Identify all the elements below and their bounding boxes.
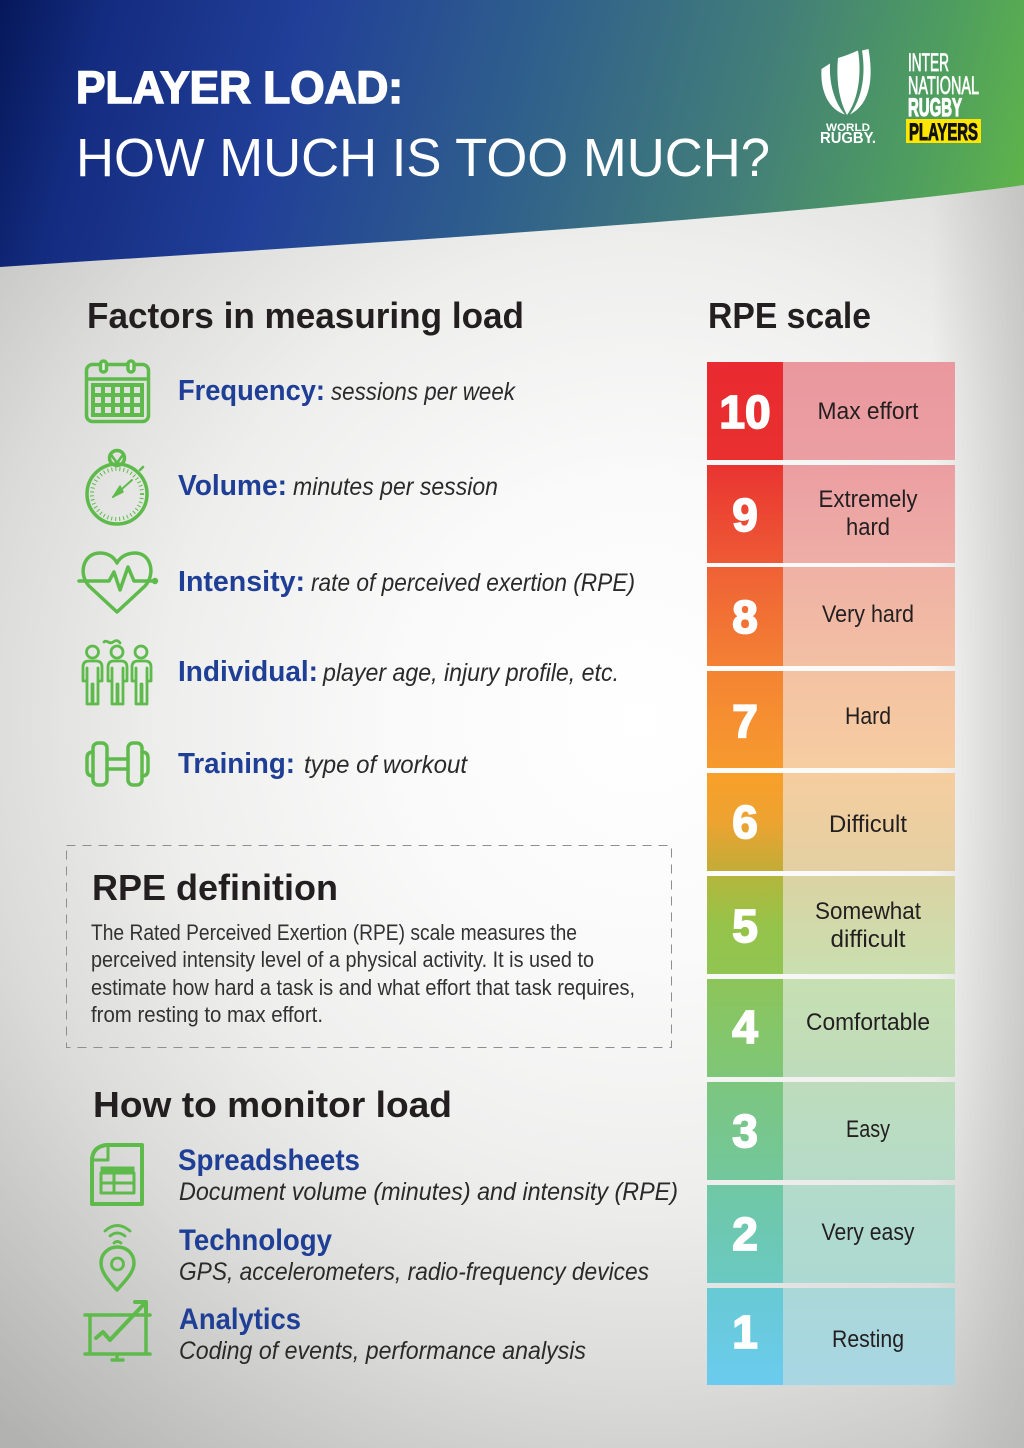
logo: International Rugby Players: INTER [908,49,949,77]
scale row 1: 1 [732,1306,758,1358]
scale row 10: 10 [719,386,771,438]
scale row 5: difficult [830,926,906,953]
heading: RPE definition: RPE definition [92,867,338,908]
panel: RPE definition [66,846,672,1048]
panel: factors in measuring load [79,295,635,785]
text: RPE definition body: estimate how hard a task is and what effort that task requires, [91,975,635,1000]
scale row 7 [707,671,955,768]
text: individual: Individual: [178,656,318,688]
scale row 8: Very hard [822,601,914,628]
heading: RPE scale: RPE scale [708,295,871,336]
text: training: Training: [178,748,295,780]
icon: stopwatch [87,450,147,524]
text: frequency: sessions per week [331,378,516,406]
text: volume: minutes per session [293,473,498,501]
scale row 5: 5 [732,900,758,952]
text: analytics: Coding of events, performance analysis [179,1337,586,1365]
text: technology: Technology [179,1224,332,1257]
icon: dumbbell [87,743,148,785]
icon: spreadsheet [92,1145,142,1204]
text: analytics [179,1303,586,1365]
title: PLAYER LOAD: [76,62,403,113]
scale row 4: Comfortable [806,1009,930,1036]
logo: World Rugby [820,49,876,147]
heading: factors: Factors in measuring load [87,295,524,336]
logo: World Rugby: RUGBY. [820,130,876,147]
text: individual [178,656,619,688]
logo: International Rugby Players: RUGBY [908,94,962,122]
text: RPE definition body [91,920,635,1027]
scale row 1 [707,1288,955,1385]
panel: how to monitor load [85,1084,678,1365]
logo: World Rugby: WORLD [826,122,870,134]
title: HOW MUCH IS TOO MUCH? [76,128,770,188]
text: intensity: Intensity: [178,566,305,598]
text: analytics: Analytics [179,1303,301,1336]
text: technology: GPS, accelerometers, radio-frequency devices [179,1258,649,1286]
panel: RPE scale [707,295,955,1385]
title [76,62,770,188]
text: frequency: Frequency: [178,375,325,407]
scale row 9: 9 [732,489,758,541]
text: individual: player age, injury profile, etc. [322,659,619,687]
scale row 7: Hard [845,703,891,730]
scale row 2: Very easy [822,1219,914,1246]
text: intensity: rate of perceived exertion (RPE) [311,569,635,597]
heading: how to monitor load: How to monitor load [93,1084,452,1125]
scale row 4 [707,979,955,1077]
icon: location with signal [101,1226,134,1290]
scale row 2 [707,1185,955,1283]
scale row 10 [707,362,955,460]
icon: heart [79,553,156,612]
header banner [0,0,1024,267]
text: spreadsheets: Spreadsheets [178,1144,360,1177]
scale row 1: Resting [832,1326,904,1353]
icon: calendar [86,361,148,422]
text: frequency [178,375,516,407]
text: spreadsheets [178,1144,678,1206]
scale row 6: Difficult [829,811,907,838]
scale row 3 [707,1082,955,1180]
text: volume [178,470,498,502]
scale row 2: 2 [732,1208,758,1260]
text: RPE definition body: from resting to max effort. [91,1002,323,1027]
scale row 8 [707,567,955,666]
scale row 6: 6 [732,796,758,848]
logo: International Rugby Players [906,49,981,146]
scale row 7: 7 [732,695,758,747]
text: RPE definition body: The Rated Perceived Exertion (RPE) scale measures the [91,920,577,945]
icon: individuals [83,641,151,704]
text: spreadsheets: Document volume (minutes) and intensity (RPE) [179,1178,678,1206]
scale row 4: 4 [732,1001,758,1053]
text: training [178,748,468,780]
scale row 9: hard [846,514,890,541]
logo: International Rugby Players: PLAYERS [909,119,978,146]
scale row 8: 8 [732,591,758,643]
text: volume: Volume: [178,470,287,502]
text: training: type of workout [304,751,468,779]
scale row 5: Somewhat [815,898,921,925]
text: technology [179,1224,649,1286]
scale row 6 [707,773,955,871]
scale row 3: Easy [846,1116,890,1143]
text: intensity [178,566,635,598]
scale row 9 [707,465,955,563]
scale row 5 [707,876,955,974]
scale row 3: 3 [732,1105,758,1157]
scale row 10: Max effort [818,398,919,425]
text: RPE definition body: perceived intensity level of a physical activity. It is used to [91,947,594,972]
scale row 9: Extremely [818,486,918,513]
icon: analytics presentation board [85,1302,150,1360]
